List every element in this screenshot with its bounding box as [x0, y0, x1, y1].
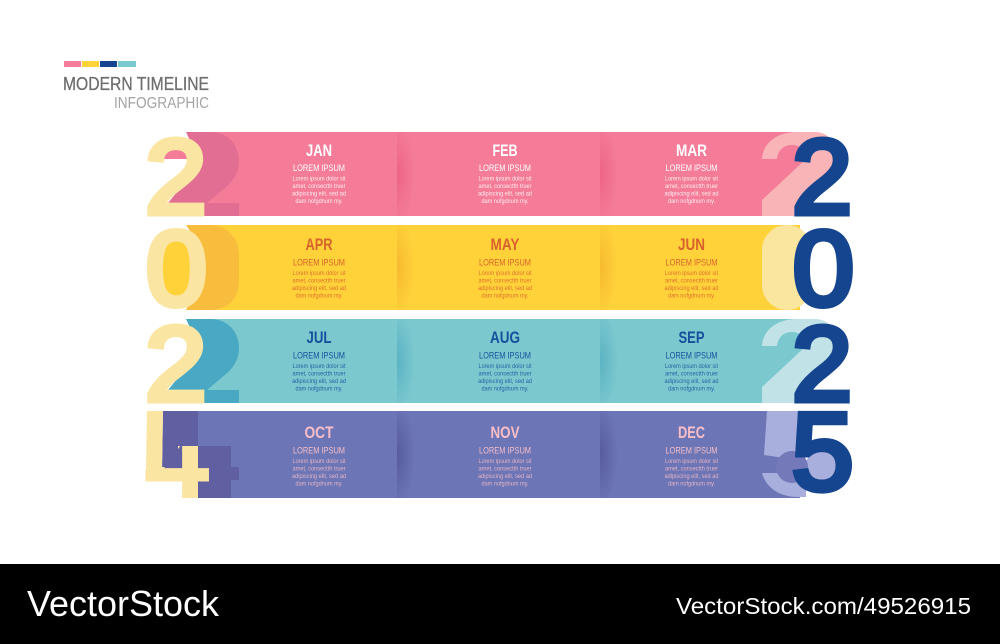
November: NOV [490, 423, 520, 442]
February: LOREM IPSUM [479, 163, 531, 173]
left digit 0: 0 [146, 209, 207, 328]
February: adipiscing elit, sed ad [478, 191, 532, 198]
left digit 2: 2 [145, 306, 207, 424]
May: LOREM IPSUM [479, 258, 531, 268]
January: Lorem ipsum dolor sit [292, 176, 346, 183]
September: LOREM IPSUM [666, 350, 718, 360]
July [292, 328, 346, 392]
January: LOREM IPSUM [293, 163, 345, 173]
colour key bars [64, 61, 136, 67]
right digit shadow [762, 225, 830, 310]
June [664, 235, 719, 300]
July: adipiscing elit, sed ad [292, 378, 346, 385]
May: amet, consectth truer [478, 278, 532, 284]
June: dam nofgdnum my. [668, 292, 715, 300]
April: dam nofgdnum my. [296, 292, 343, 300]
July: JUL [306, 328, 332, 347]
May: adipiscing elit, sed ad [478, 285, 532, 292]
December: LOREM IPSUM [666, 446, 718, 456]
April: Lorem ipsum dolor sit [292, 270, 346, 277]
left digit shadow [168, 132, 239, 216]
October: amet, consectth truer [292, 466, 346, 472]
right digit 0: 0 [793, 209, 854, 328]
May: MAY [490, 235, 520, 254]
January [292, 141, 346, 205]
left digit shadow [168, 319, 239, 403]
August: dam nofgdnum my. [482, 386, 529, 392]
April: LOREM IPSUM [293, 258, 345, 268]
left digit shadow [162, 411, 239, 498]
right digit shadow [762, 132, 845, 216]
header: title block [63, 61, 209, 112]
ribbon: pink [162, 132, 806, 216]
August: LOREM IPSUM [479, 350, 531, 360]
December [664, 423, 719, 488]
January: adipiscing elit, sed ad [292, 191, 346, 198]
right digit 2: 2 [792, 304, 852, 423]
February: amet, consectth truer [478, 183, 532, 190]
row 2: Apr to Jun [146, 209, 854, 328]
September: adipiscing elit, sed ad [664, 378, 719, 385]
right digit 2: 2 [792, 117, 852, 236]
July: dam nofgdnum my. [296, 386, 343, 392]
ribbon: purple [197, 411, 800, 498]
July: Lorem ipsum dolor sit [292, 363, 346, 370]
February [478, 141, 532, 205]
footer logo text: VectorStock [27, 583, 220, 624]
footer image id: VectorStock.com/49526915 [676, 593, 971, 619]
right digit 5: 5 [792, 391, 853, 513]
January: dam nofgdnum my. [296, 198, 343, 205]
right digit shadow [762, 319, 845, 403]
row 3: Jul to Sep [145, 304, 852, 424]
February: FEB [492, 141, 518, 160]
row 1: Jan to Mar [145, 117, 852, 237]
October: Lorem ipsum dolor sit [292, 458, 346, 465]
November: amet, consectth truer [478, 466, 532, 472]
left digit 2: 2 [145, 119, 207, 237]
December: DEC [678, 423, 705, 442]
August: AUG [490, 328, 520, 347]
May [478, 235, 532, 300]
March: adipiscing elit, sed ad [664, 191, 719, 198]
December: adipiscing elit, sed ad [664, 473, 719, 480]
February: Lorem ipsum dolor sit [478, 176, 532, 183]
right digit shadow [762, 411, 843, 497]
August: adipiscing elit, sed ad [478, 378, 532, 385]
April [292, 235, 346, 300]
June: Lorem ipsum dolor sit [665, 270, 718, 277]
March: MAR [676, 141, 707, 160]
August: Lorem ipsum dolor sit [478, 363, 532, 370]
July: LOREM IPSUM [293, 350, 345, 360]
September: SEP [678, 328, 704, 347]
March: LOREM IPSUM [666, 163, 718, 173]
February: dam nofgdnum my. [482, 198, 529, 205]
April: adipiscing elit, sed ad [292, 285, 346, 292]
December: amet, consectth truer [665, 466, 719, 472]
January: JAN [306, 141, 332, 160]
subtitle: INFOGRAPHIC [114, 95, 209, 112]
March: dam nofgdnum my. [668, 198, 715, 205]
October: OCT [304, 423, 334, 442]
row 4: Oct to Dec [145, 410, 852, 498]
September [664, 328, 719, 392]
July: amet, consectth truer [292, 370, 346, 378]
January: amet, consectth truer [292, 183, 346, 190]
June: LOREM IPSUM [666, 258, 718, 268]
October [292, 423, 346, 488]
June: JUN [678, 235, 705, 254]
March: amet, consectth truer [665, 183, 719, 190]
August [478, 328, 532, 392]
left digit shadow [186, 225, 239, 310]
April: amet, consectth truer [292, 278, 346, 284]
May: Lorem ipsum dolor sit [478, 270, 532, 277]
December: Lorem ipsum dolor sit [665, 458, 718, 465]
April: APR [306, 235, 332, 254]
November: Lorem ipsum dolor sit [478, 458, 532, 465]
October: adipiscing elit, sed ad [292, 473, 346, 480]
September: Lorem ipsum dolor sit [665, 363, 718, 370]
December: dam nofgdnum my. [668, 480, 715, 488]
March: Lorem ipsum dolor sit [665, 176, 718, 183]
left digit 4: 4 [146, 400, 209, 518]
August: amet, consectth truer [478, 370, 532, 378]
ribbon: teal [190, 319, 806, 403]
November: adipiscing elit, sed ad [478, 473, 532, 480]
footer bar [0, 564, 1000, 644]
November [478, 423, 532, 488]
October: LOREM IPSUM [293, 446, 345, 456]
November: LOREM IPSUM [479, 446, 531, 456]
June: amet, consectth truer [665, 278, 719, 284]
November: dam nofgdnum my. [482, 480, 529, 488]
September: amet, consectth truer [665, 370, 719, 378]
September: dam nofgdnum my. [668, 386, 715, 392]
March [664, 141, 719, 205]
June: adipiscing elit, sed ad [664, 285, 719, 292]
October: dam nofgdnum my. [296, 480, 343, 488]
May: dam nofgdnum my. [482, 292, 529, 300]
title: MODERN TIMELINE [63, 74, 209, 94]
ribbon: yellow [160, 225, 800, 310]
